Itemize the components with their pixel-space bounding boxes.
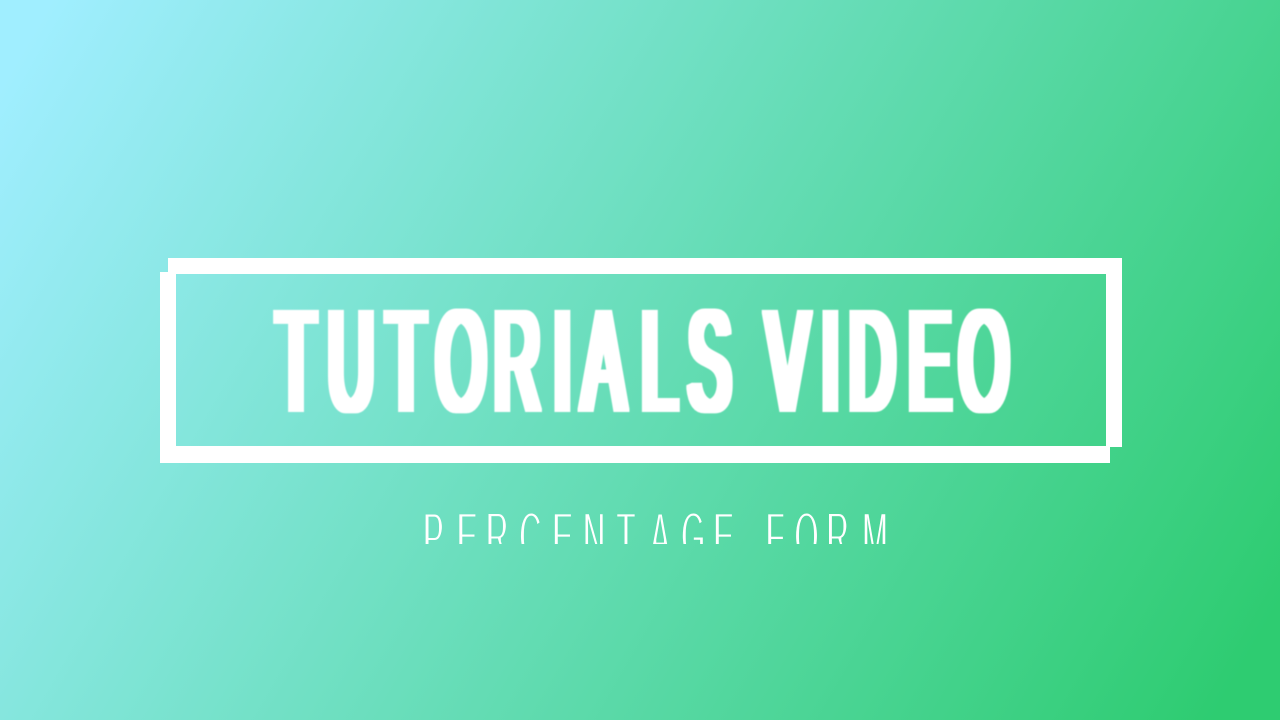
offset rectangular frame <box>160 258 1122 463</box>
title card <box>160 258 1122 544</box>
heading: tutorials video: TUTORIALS VIDEO <box>277 280 1009 442</box>
subtitle: percentage form (clipped reveal): PERCENTAGE FORM <box>423 499 888 575</box>
